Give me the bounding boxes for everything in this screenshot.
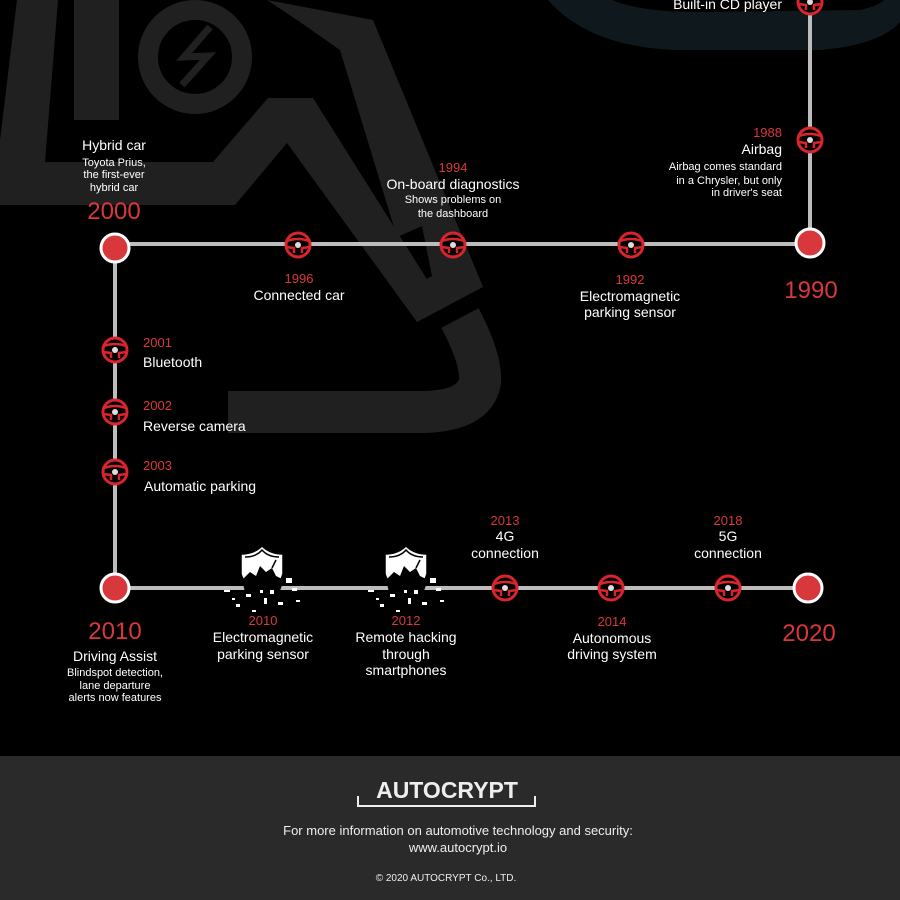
labels: 2001 [143,335,172,350]
labels: through [382,646,430,662]
labels: Toyota Prius, [82,157,146,169]
labels: smartphones [366,662,446,678]
labels: 5G [719,528,737,544]
labels: 2012 [392,613,420,628]
labels: Driving Assist [73,648,157,664]
labels: Bluetooth [143,354,202,370]
labels: 1992 [616,272,644,287]
labels: 2013 [491,513,519,528]
footer: © 2020 AUTOCRYPT Co., LTD. [376,873,516,884]
labels: Hybrid car [82,137,146,153]
labels: Shows problems on [405,194,501,206]
labels: Reverse camera [143,418,246,434]
labels: 2002 [143,398,172,413]
labels: Blindspot detection, [67,667,163,679]
labels: Airbag [742,141,782,157]
labels: in driver's seat [711,187,782,199]
decoration: top right arc [548,0,900,50]
timeline lines [115,0,810,588]
labels: hybrid car [90,182,138,194]
footer [0,756,900,900]
labels: Autonomous [573,630,651,646]
labels: 4G [496,528,514,544]
labels: the dashboard [418,208,488,220]
labels: 1990 [784,277,838,304]
labels: Electromagnetic [213,629,313,645]
labels: Connected car [253,287,345,303]
big nodes [101,229,824,602]
labels: parking sensor [217,646,309,662]
labels: Airbag comes standard [669,161,782,173]
labels: 2020 [782,620,836,647]
labels: 2010 [88,618,142,645]
labels: in a Chrysler, but only [676,175,782,187]
footer: www.autocrypt.io [408,840,507,855]
labels: 1996 [285,271,313,286]
labels: connection [471,545,539,561]
footer: For more information on automotive technology and security: [283,823,633,838]
footer: AUTOCRYPT [376,777,518,803]
labels: alerts now features [69,692,162,704]
labels: 2000 [87,198,141,225]
labels: Automatic parking [144,478,256,494]
background decoration [0,0,483,412]
labels: 1994 [439,160,467,175]
labels: On-board diagnostics [386,176,520,192]
labels: driving system [567,646,657,662]
labels: the first-ever [83,169,145,181]
labels: 2003 [143,458,172,473]
labels: lane departure [80,680,150,692]
labels: parking sensor [584,304,676,320]
icon: broken shields [224,546,444,612]
labels: 2010 [249,613,277,628]
labels: 2014 [598,614,626,629]
labels: 1988 [753,125,782,140]
labels: 2018 [714,513,742,528]
labels: Electromagnetic [580,288,680,304]
small nodes [103,0,822,600]
labels [67,0,838,704]
labels: connection [694,545,762,561]
labels: Remote hacking [355,629,457,645]
